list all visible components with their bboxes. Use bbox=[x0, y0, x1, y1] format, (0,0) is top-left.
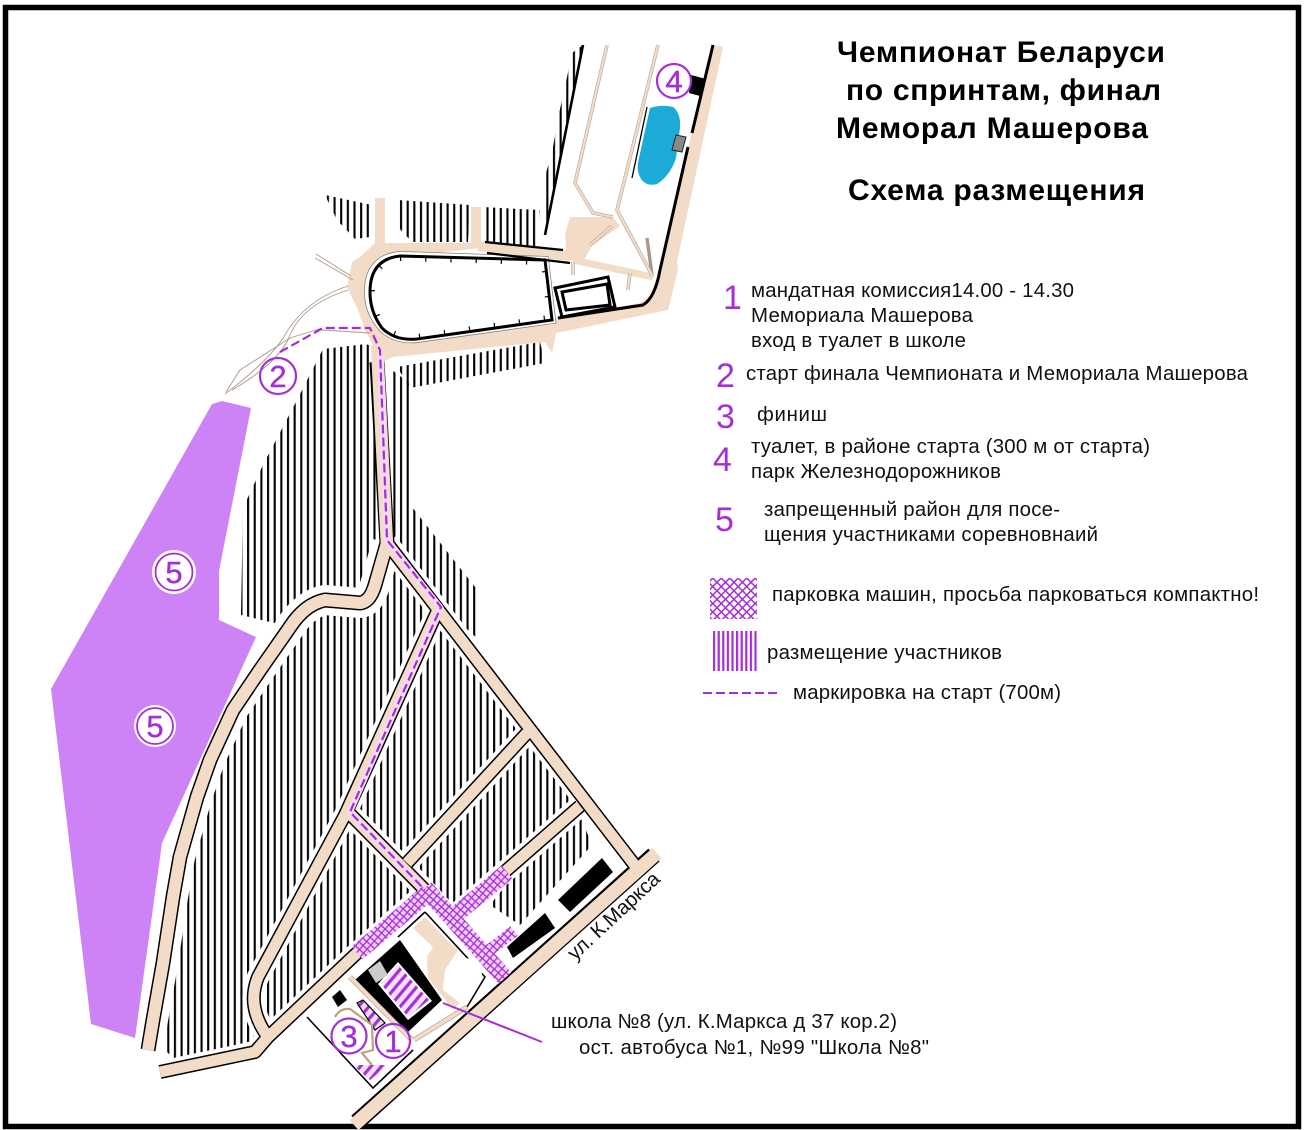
marker 5 lower bbox=[134, 705, 176, 747]
list item 2 bbox=[716, 357, 1249, 395]
icon: toilet building bbox=[689, 75, 706, 96]
icon: small gray building bbox=[672, 135, 686, 152]
icon: walled rectangle bbox=[555, 277, 615, 317]
marker 5 upper bbox=[152, 550, 196, 594]
list item 5: запрещенный район для посе- bbox=[764, 499, 1060, 521]
list item 3 bbox=[716, 398, 827, 436]
map: restricted zone bbox=[51, 401, 256, 1038]
school caption: школа №8 (ул. К.Маркса д 37 кор.2) bbox=[551, 1011, 897, 1033]
list item 5: щения участниками соревновнаий bbox=[764, 524, 1098, 546]
title: Чемпионат Беларуси bbox=[837, 36, 1165, 69]
marker 1 bbox=[376, 1024, 410, 1059]
marker 5 lower: 5 bbox=[146, 709, 164, 744]
school pointer bbox=[443, 1003, 542, 1042]
list item 3: 3 bbox=[716, 398, 735, 436]
marker 1: 1 bbox=[384, 1024, 402, 1059]
map: road network south bbox=[148, 345, 657, 1125]
list item 2: старт финала Чемпионата и Мемориала Машерова bbox=[746, 363, 1249, 385]
black buildings along street bbox=[507, 858, 613, 958]
legend: parking bbox=[710, 578, 1259, 619]
list item 4: парк Железнодорожников bbox=[751, 461, 1001, 483]
marker 2 bbox=[260, 358, 296, 394]
legend: route marking: маркировка на старт (700м) bbox=[793, 682, 1061, 704]
list item 4 bbox=[713, 436, 1150, 483]
title: Схема размещения bbox=[848, 174, 1145, 207]
title: Меморал Машерова bbox=[836, 112, 1148, 145]
school caption bbox=[551, 1011, 929, 1059]
map: start route marking bbox=[280, 328, 441, 890]
map: parking areas bbox=[357, 872, 514, 978]
map: start route highlight bbox=[350, 350, 440, 890]
list item 4: туалет, в районе старта (300 м от старта) bbox=[751, 436, 1150, 458]
school caption: ост. автобуса №1, №99 "Школа №8" bbox=[579, 1037, 929, 1059]
marker 4 bbox=[657, 64, 691, 99]
map: school grounds bbox=[307, 912, 485, 1088]
list item 2: 2 bbox=[716, 357, 735, 395]
marker 4: 4 bbox=[665, 64, 683, 99]
title bbox=[836, 36, 1165, 207]
trails near start bbox=[225, 254, 370, 394]
title: по спринтам, финал bbox=[846, 74, 1161, 107]
legend: participants: размещение участников bbox=[767, 642, 1002, 664]
legend: participants bbox=[713, 631, 1002, 671]
list item 4: 4 bbox=[713, 441, 732, 479]
marker 3: 3 bbox=[340, 1019, 358, 1054]
list item 3: финиш bbox=[757, 404, 827, 426]
street label: ул. К.Маркса bbox=[563, 868, 665, 965]
map: white margin beside roads bbox=[148, 543, 640, 1072]
marker 2: 2 bbox=[269, 359, 287, 394]
marker 5 upper: 5 bbox=[165, 555, 183, 590]
legend: parking: парковка машин, просьба парковаться компактно! bbox=[772, 584, 1259, 606]
list item 1: 1 bbox=[723, 279, 742, 317]
list item 1 bbox=[723, 279, 1074, 352]
marker 3 bbox=[332, 1018, 366, 1054]
list item 5: 5 bbox=[715, 501, 734, 539]
list item 1: вход в туалет в школе bbox=[751, 330, 966, 352]
list item 5 bbox=[715, 499, 1098, 546]
list item 1: мандатная комиссия14.00 - 14.30 bbox=[751, 280, 1074, 302]
list item 1: Мемориала Машерова bbox=[751, 305, 974, 327]
map: participants area hatching bbox=[165, 45, 592, 1062]
icon: lake bbox=[638, 106, 680, 185]
map: north park area with stadium bbox=[225, 45, 723, 394]
